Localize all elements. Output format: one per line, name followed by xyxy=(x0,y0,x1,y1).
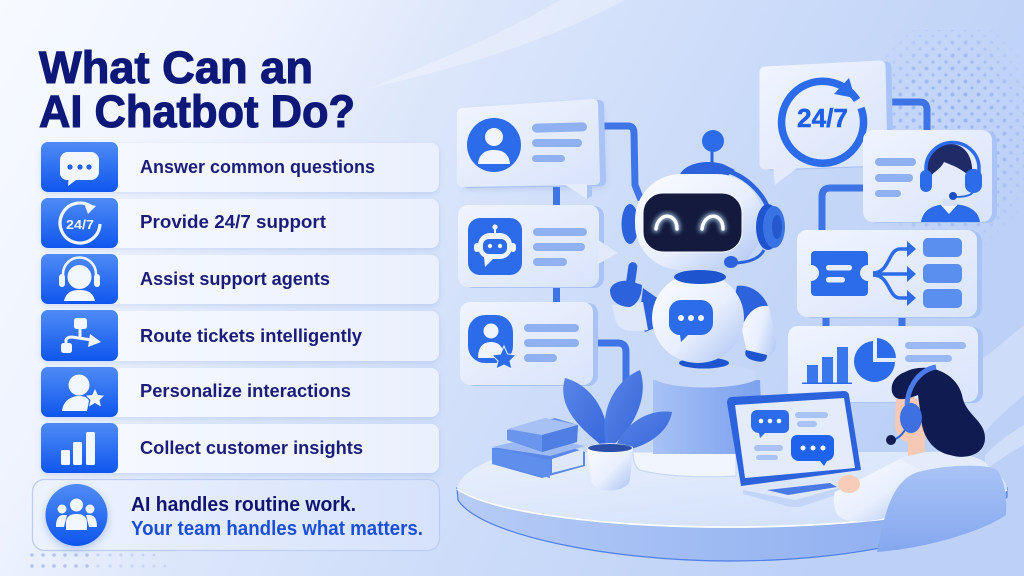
panel: insights card xyxy=(788,326,983,403)
callout text: Your team handles what matters. xyxy=(131,518,423,540)
row: route tickets intelligently: Route tickets intelligently xyxy=(140,325,363,346)
headset xyxy=(724,170,785,268)
row: collect customer insights: Collect customer insights xyxy=(140,437,363,458)
platform xyxy=(457,452,1007,561)
panel: 24/7 bubble xyxy=(765,66,888,185)
row: personalize interactions: Personalize interactions xyxy=(140,380,351,401)
connectors xyxy=(592,102,927,384)
panel: 24/7 bubble: 24/7 xyxy=(797,103,848,133)
row: personalize interactions xyxy=(41,367,439,417)
row: collect customer insights xyxy=(41,423,439,473)
dot row decoration xyxy=(30,553,167,568)
woman at laptop xyxy=(834,367,1006,552)
title xyxy=(39,42,355,137)
headset xyxy=(886,367,936,445)
left ear xyxy=(622,204,638,244)
torso xyxy=(652,273,744,363)
leaves xyxy=(563,370,672,452)
head xyxy=(635,174,763,270)
title: AI Chatbot Do? xyxy=(39,86,355,137)
panel: customer profile bubble xyxy=(462,104,601,199)
plant xyxy=(563,370,672,491)
icon: team xyxy=(46,484,108,546)
connector: stacked bubbles xyxy=(553,187,560,302)
pot xyxy=(587,443,633,491)
face and neck xyxy=(895,396,925,456)
title: What Can an xyxy=(39,42,313,93)
icon: ticket xyxy=(811,251,868,296)
icon: agent with headset xyxy=(920,143,982,222)
row: provide 24/7 support: 24/7 xyxy=(66,218,94,232)
arrows: routing xyxy=(873,249,909,298)
antenna xyxy=(680,130,735,178)
robot pedestal xyxy=(633,358,763,477)
icon: bot face xyxy=(474,224,516,267)
pie chart xyxy=(854,338,896,382)
feature list xyxy=(41,142,439,473)
panel: bot bubble xyxy=(458,205,618,288)
row: answer common questions: Answer common questions xyxy=(140,156,375,177)
row: route tickets intelligently xyxy=(41,310,439,361)
chat bubbles on screen xyxy=(751,410,834,466)
right arm xyxy=(735,286,779,362)
callout text: AI handles routine work. xyxy=(131,494,356,516)
panel: support agent card xyxy=(863,130,997,223)
neck xyxy=(674,270,726,284)
chat badge xyxy=(669,300,713,342)
row: provide 24/7 support: Provide 24/7 support xyxy=(140,211,326,232)
row: provide 24/7 support xyxy=(41,198,439,248)
row: assist support agents: Assist support agents xyxy=(140,268,330,289)
left arm and pointing hand xyxy=(610,262,660,332)
row: answer common questions xyxy=(41,142,439,192)
robot xyxy=(610,130,785,363)
laptop xyxy=(727,391,872,507)
books xyxy=(492,418,585,478)
panel: ticket routing card xyxy=(797,230,982,318)
torso and arm xyxy=(900,452,995,500)
bar chart xyxy=(802,347,852,384)
panel: personalized bubble xyxy=(460,302,598,386)
callout xyxy=(32,480,440,550)
chair xyxy=(877,466,1006,552)
hair xyxy=(892,368,985,457)
row: assist support agents xyxy=(41,254,439,304)
face screen xyxy=(643,193,742,252)
callout text xyxy=(131,494,423,540)
